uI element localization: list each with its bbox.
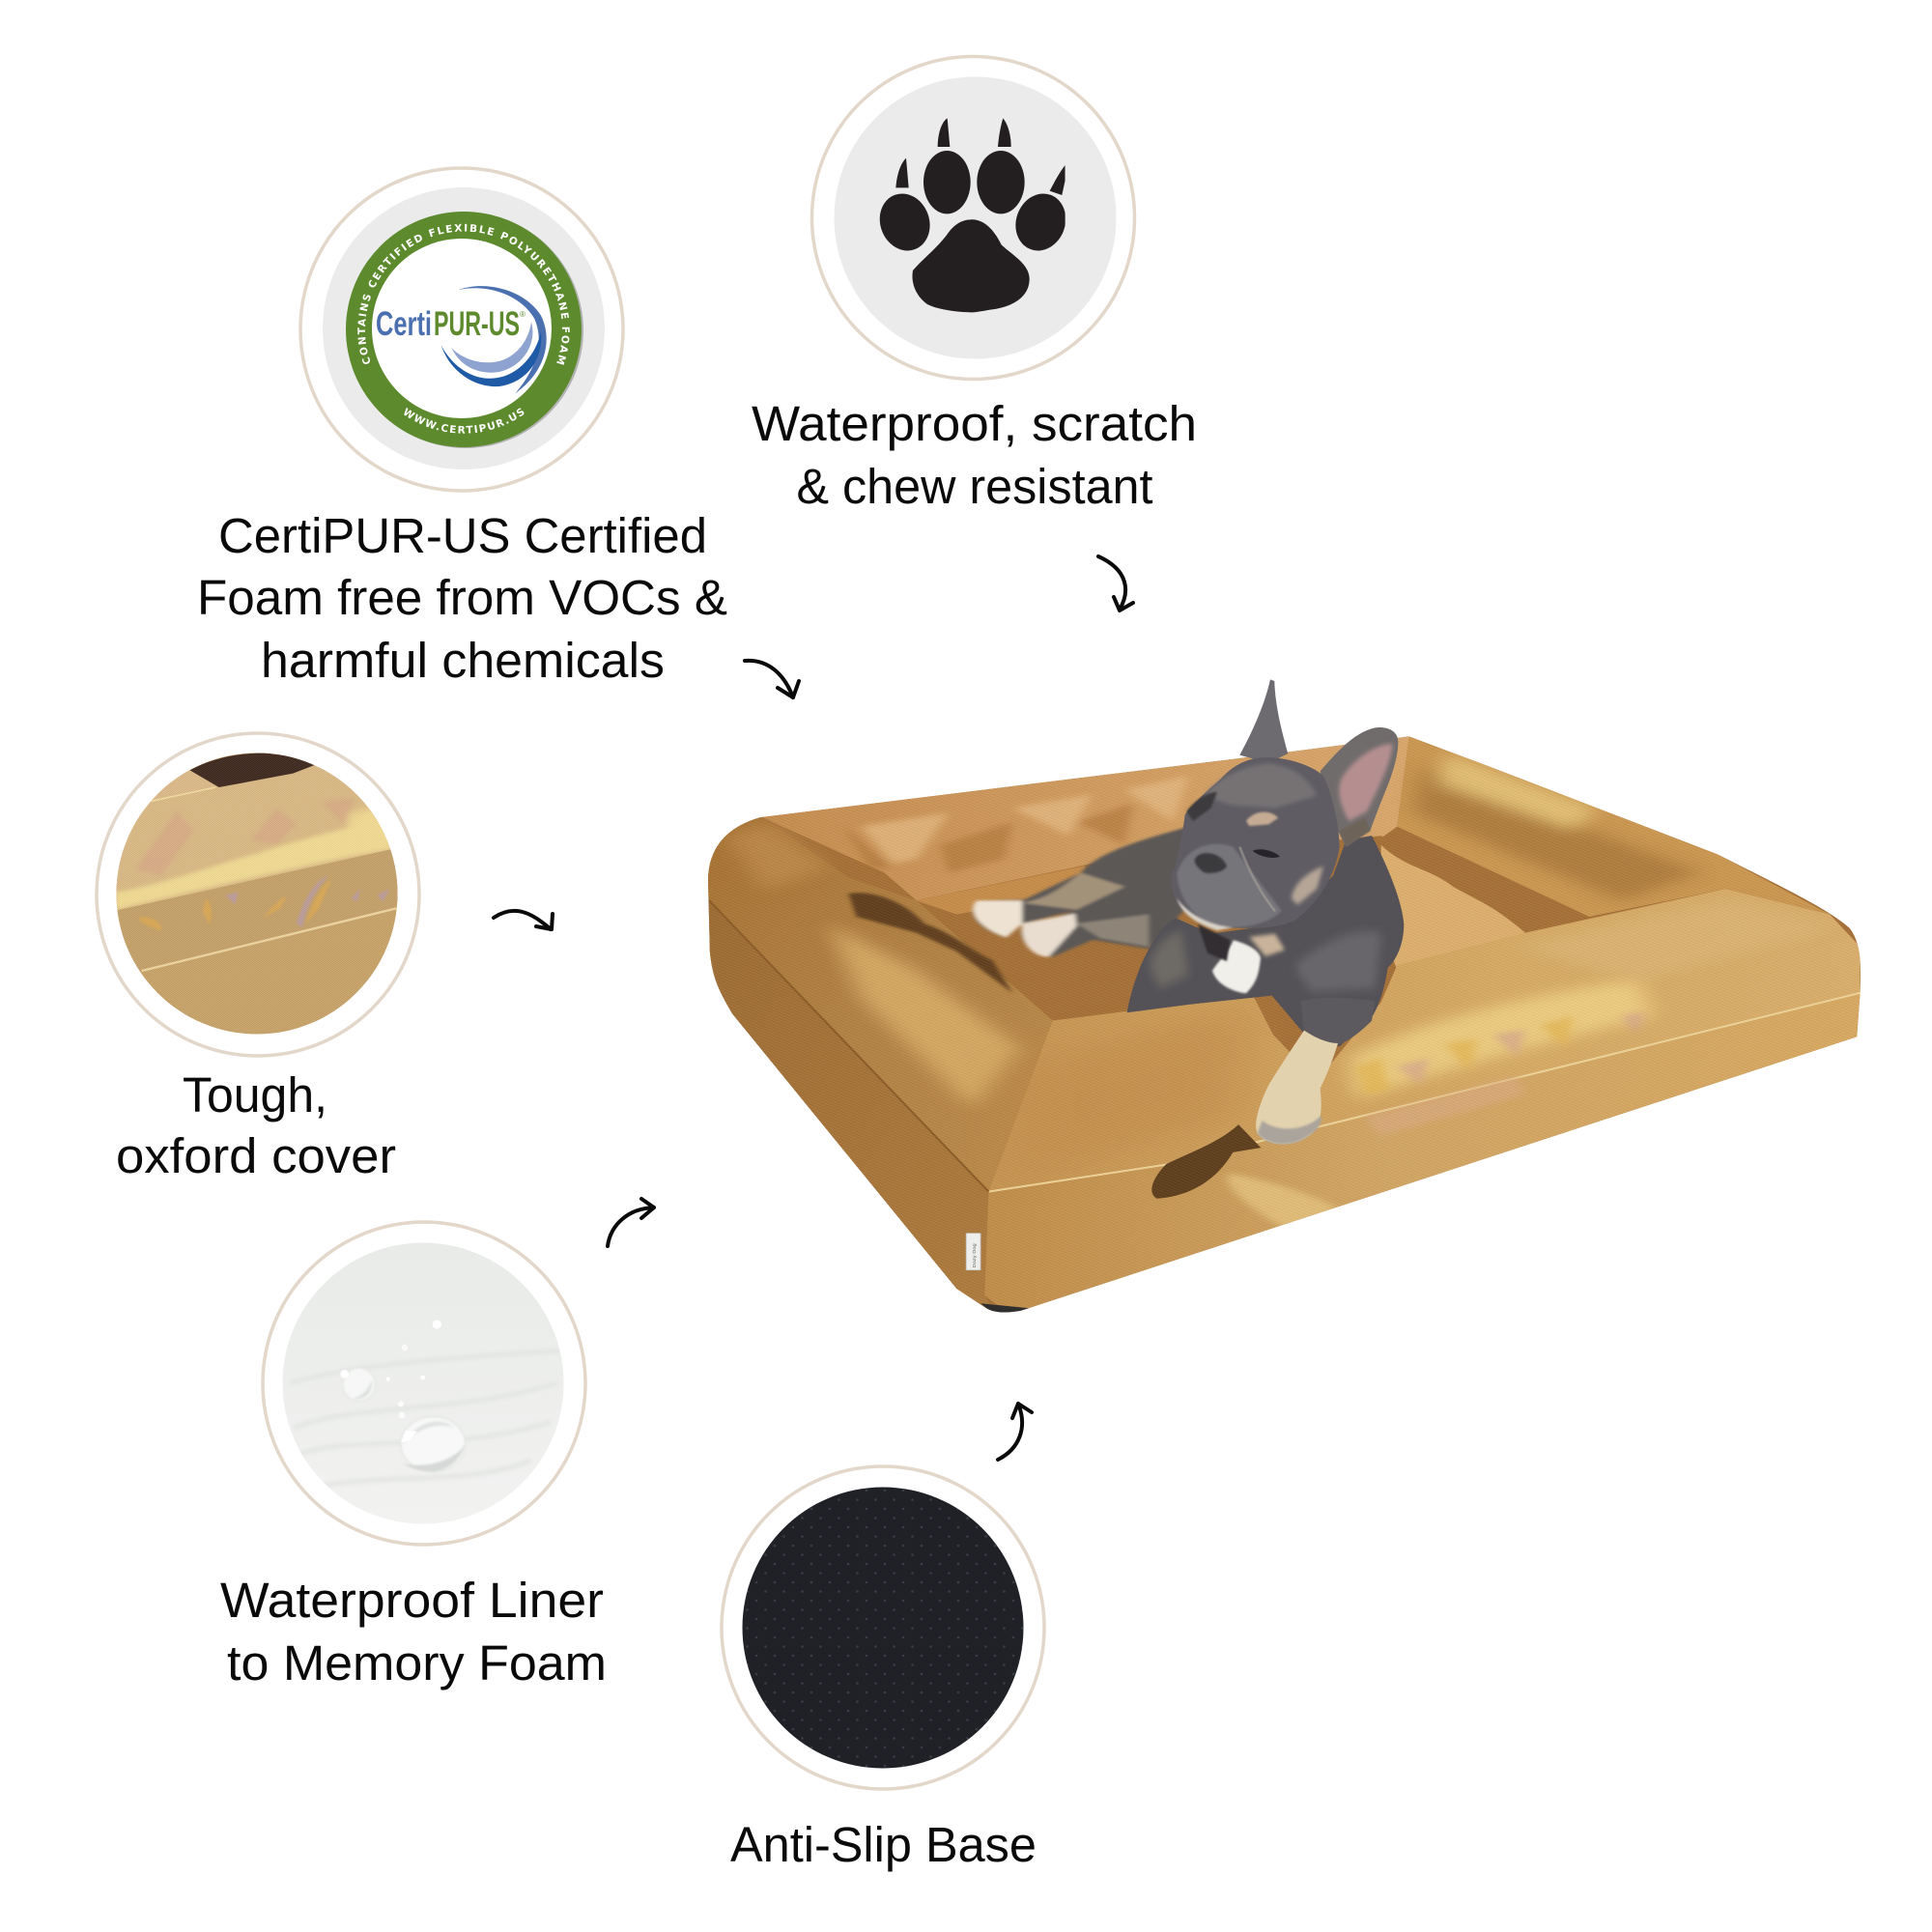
icon: CertiPUR-US seal: CONTAINS CERTIFIED FLEXIBLE POLYURETHANE FOAM xyxy=(357,224,570,365)
moire colour patches xyxy=(1357,1011,1645,1094)
label: liner text xyxy=(220,1573,607,1690)
arrow: liner to bed xyxy=(608,1199,654,1246)
paw grey disc xyxy=(835,77,1117,359)
label: CertiPUR-US text xyxy=(197,508,727,688)
label: oxford cover text xyxy=(116,1067,396,1183)
liner ring xyxy=(263,1222,585,1545)
bed base front xyxy=(984,990,1861,1317)
label: waterproof text: Waterproof, scratch xyxy=(752,396,1197,451)
panel: waterproof scratch resistant xyxy=(752,56,1197,514)
paw ring xyxy=(811,56,1134,379)
label: oxford cover text: oxford cover xyxy=(116,1128,396,1183)
label: CertiPUR-US text: harmful chemicals xyxy=(261,633,665,688)
panel: anti-slip base xyxy=(722,1466,1044,1872)
panel: oxford cover xyxy=(97,733,425,1183)
label: liner text: to Memory Foam xyxy=(227,1635,607,1690)
bed underside xyxy=(980,1303,1029,1312)
label: oxford cover text: Tough, xyxy=(183,1067,327,1122)
fabric sheen streaks on base xyxy=(1228,1173,1341,1229)
dog right ear xyxy=(1321,727,1398,847)
icon: CertiPUR-US seal xyxy=(346,212,583,448)
label: CertiPUR-US text: CertiPUR-US Certified xyxy=(218,508,707,563)
white care tag xyxy=(966,1234,980,1270)
dog xyxy=(1127,679,1404,1144)
bed inner floor xyxy=(954,836,1383,893)
bed seam xyxy=(988,993,1861,1192)
panel: waterproof liner xyxy=(220,1222,607,1690)
white care tag: Dozy Dog xyxy=(972,1243,978,1267)
arrow: certipur to bed xyxy=(745,661,799,697)
dog's outstretched forelegs xyxy=(973,824,1197,957)
icon: CertiPUR-US seal: PUR-US xyxy=(434,305,520,343)
dog head xyxy=(1171,757,1340,928)
fabric swatch xyxy=(116,753,398,1034)
dog foreleg xyxy=(1301,998,1375,1045)
label: base text: Anti-Slip Base xyxy=(730,1817,1037,1872)
arrow: base to bed xyxy=(998,1404,1032,1460)
panel: CertiPUR-US certification xyxy=(197,166,727,688)
dog left ear xyxy=(1239,679,1288,763)
icon: CertiPUR-US seal: Certi xyxy=(376,305,432,343)
icon: paw print xyxy=(872,118,1073,312)
bed silhouette fill xyxy=(676,721,1878,1321)
base ring xyxy=(722,1466,1044,1789)
icon: CertiPUR-US seal: WWW.CERTIPUR.US xyxy=(404,408,524,434)
bed front rim xyxy=(988,889,1861,1192)
label: liner text: Waterproof Liner xyxy=(220,1573,604,1628)
bed left rim xyxy=(700,816,1053,1192)
cover ring xyxy=(97,733,419,1056)
product photo: dog bed with french bulldog xyxy=(676,679,1878,1321)
badge grey disc xyxy=(323,187,605,469)
arrow: waterproof to bed xyxy=(1098,556,1133,611)
badge ring xyxy=(300,168,623,491)
dog eye xyxy=(1253,849,1280,858)
bed right rim xyxy=(1397,736,1830,917)
dog body xyxy=(1127,836,1404,1046)
dog nose xyxy=(1195,853,1227,873)
base swatch xyxy=(742,1488,1024,1768)
dog white chest xyxy=(1212,940,1261,993)
bed back rim xyxy=(760,736,1409,900)
dog shadow on left rim xyxy=(848,893,1012,993)
dog bed xyxy=(676,721,1878,1321)
liner swatch with droplets xyxy=(280,1241,570,1526)
paw shadow on front rim xyxy=(1151,1124,1261,1199)
label: waterproof text xyxy=(752,396,1197,514)
label: CertiPUR-US text: Foam free from VOCs & xyxy=(197,570,727,625)
arrow: cover to bed xyxy=(494,911,553,929)
label: waterproof text: & chew resistant xyxy=(796,459,1153,514)
bed base left side xyxy=(700,892,997,1317)
icon: CertiPUR-US seal: ® xyxy=(520,310,526,319)
back rim wrinkles xyxy=(844,776,1189,872)
weave texture xyxy=(676,721,1878,1321)
